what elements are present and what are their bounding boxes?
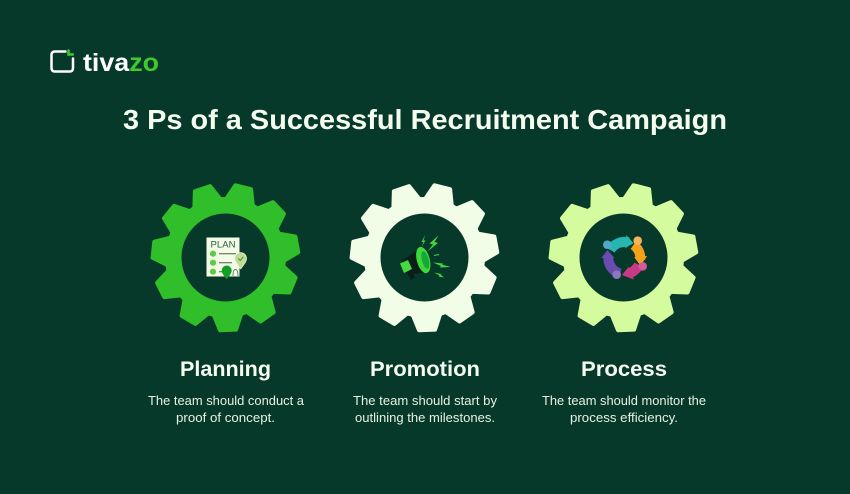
text: planning description: [148, 394, 304, 425]
logo: tivazo: [52, 49, 159, 77]
gear: promotion: [349, 181, 501, 332]
panel: promotion: [349, 181, 501, 425]
text: promotion description: outlining the milestones.: [355, 411, 495, 425]
text: planning description: The team should conduct a: [148, 394, 304, 408]
panel: planning: [148, 181, 304, 425]
heading: process: Process: [581, 358, 667, 381]
text: process description: The team should monitor the: [542, 394, 706, 408]
heading: promotion: Promotion: [370, 358, 480, 381]
icon: plan checklist: [206, 238, 247, 279]
text: planning description: proof of concept.: [176, 411, 275, 425]
gear: process: [548, 181, 700, 332]
text: process description: [542, 394, 706, 425]
text: process description: process efficiency.: [570, 411, 678, 425]
icon: megaphone with sparks: [400, 235, 450, 280]
icon: cycle of arrows: [601, 235, 647, 280]
icon: plan checklist: PLAN: [210, 240, 236, 250]
text: promotion description: [353, 394, 498, 425]
gear: planning: [150, 181, 302, 332]
text: promotion description: The team should start by: [353, 394, 498, 408]
icon: logo mark: [52, 50, 73, 72]
title: 3 Ps of a Successful Recruitment Campaign: [123, 104, 727, 135]
logo wordmark: tivazo: [83, 49, 159, 77]
heading: planning: Planning: [180, 358, 271, 381]
panel: process: [542, 181, 706, 425]
